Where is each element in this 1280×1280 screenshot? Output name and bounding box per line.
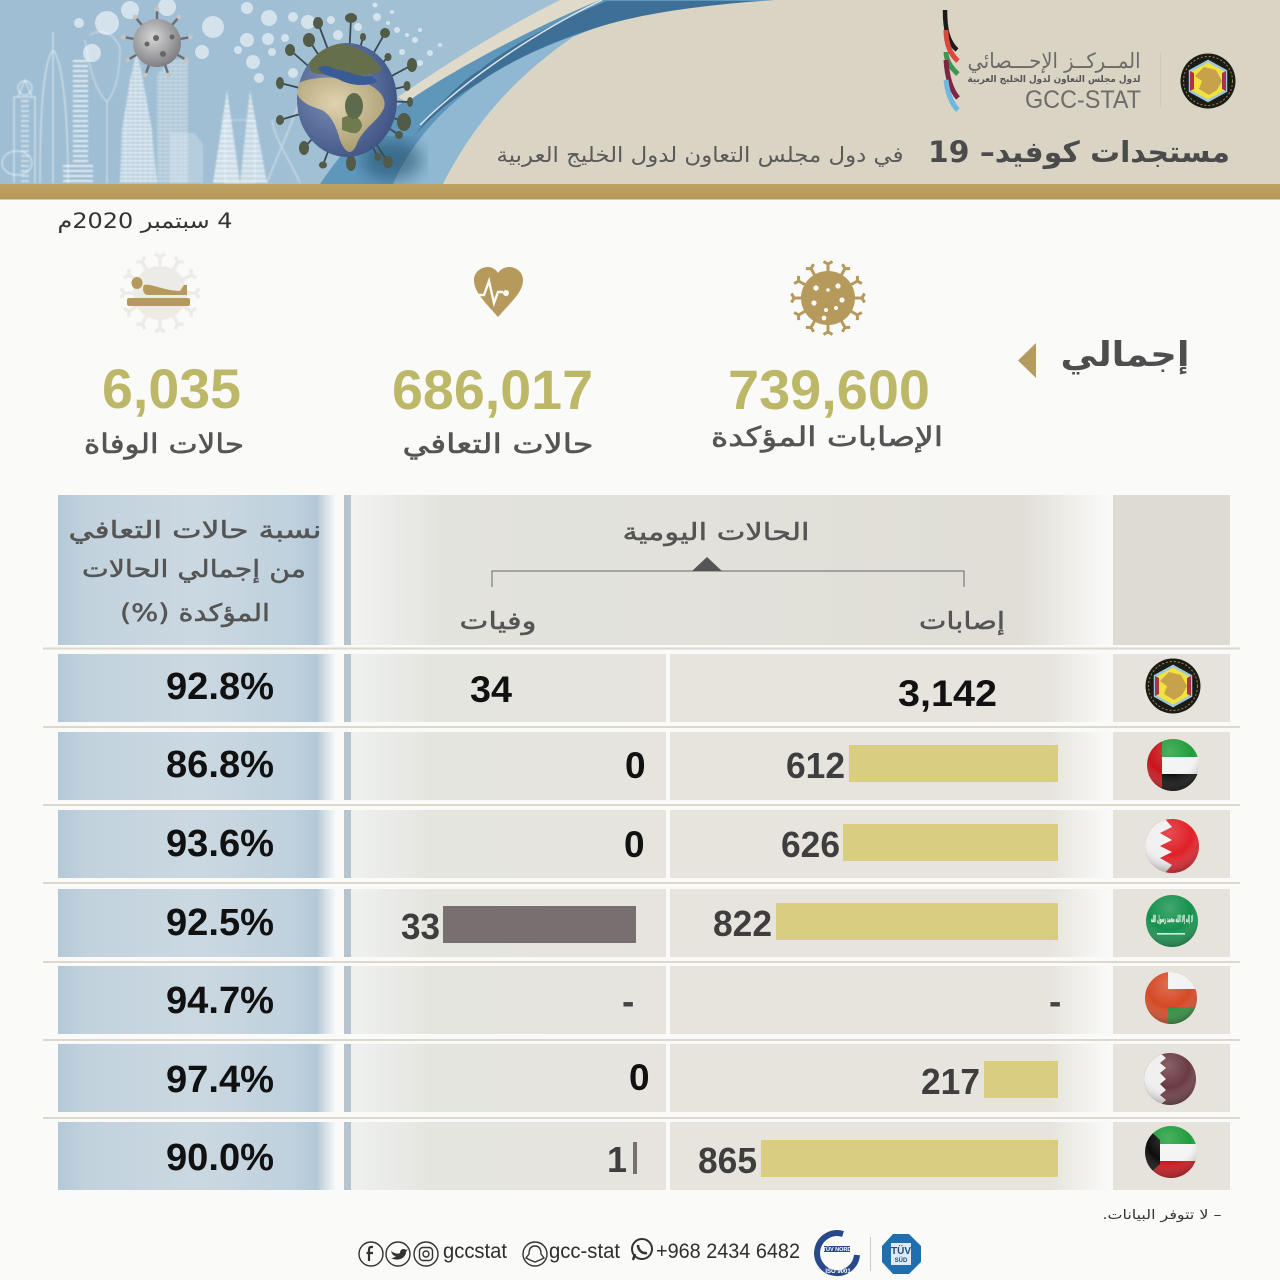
label: الإصابات المؤكدة [711,422,943,453]
icon: social media [359,1239,652,1266]
row: Qatar: 217 [921,1061,980,1102]
icon: TUV badge: TÜV [891,1244,911,1257]
row: UAE: 0 [625,745,646,786]
header: daily cases: إصابات [919,607,1005,636]
kpi: deaths [84,254,244,460]
header: daily cases [351,495,1111,645]
row: Oman: - [622,981,634,1022]
row: Kuwait: 1 [607,1139,627,1180]
row: Saudi Arabia: 92.5% [166,902,274,944]
gold band [0,184,1280,200]
number: 686,017 [392,358,593,421]
header banner [0,0,1280,184]
logo text: GCC-STAT: لدول مجلس التعاون لدول الخليج العربية [968,74,1140,85]
arrow [1018,343,1036,378]
flag: Oman [1145,972,1197,1024]
table header [58,495,1230,645]
icon: TUV badge [882,1234,921,1274]
icon: ISO certification badge [817,1233,857,1275]
number: 739,600 [728,358,930,421]
row: Bahrain: 626 [781,824,840,865]
row: UAE [58,732,1230,800]
row: GCC: 3,142 [898,673,997,714]
row: Qatar: 97.4% [166,1059,274,1101]
logo text: GCC-STAT: GCC-STAT [1025,86,1141,114]
section label: total: إجمالي [1060,335,1190,375]
row separators [43,648,1240,1118]
row: Saudi Arabia [58,889,1230,957]
row: Saudi Arabia: لا إله إلا الله محمد رسول الله [1151,915,1193,925]
footer: social contacts: gcc-stat [549,1240,620,1263]
footnote: – لا تتوفر البيانات. [1102,1208,1222,1223]
footer: social contacts [359,1239,800,1266]
row: UAE: 612 [786,745,845,786]
flag: Kuwait [1145,1126,1197,1178]
flag: Qatar [1144,1053,1196,1105]
icon: TUV badge: SÜD [895,1257,908,1264]
row: Bahrain: 0 [624,824,645,865]
logo text: GCC-STAT [968,49,1141,114]
row: Qatar [58,1044,1230,1112]
row: GCC [58,654,1230,722]
icon: virus [792,262,864,334]
section label: total [1018,335,1190,378]
kpi: confirmed cases [711,262,943,453]
label: حالات الوفاة [84,429,244,460]
row: Kuwait: 90.0% [166,1137,274,1179]
flag: Saudi Arabia [1146,895,1198,947]
kpi: recovered cases [392,267,594,460]
illustration: globe virus [276,13,422,180]
header: recovery percentage: من إجمالي الحالات [82,555,306,584]
logo text: GCC-STAT: المــركــز الإحـــصائي [968,49,1140,73]
row: Oman: - [1049,981,1061,1022]
row: UAE: 86.8% [166,744,274,786]
title: مستجدات كوفيد– 19 [928,135,1230,169]
date: 4 سبتمبر 2020م [58,209,232,233]
icon: ISO certification badge: ISO 9001 [825,1269,851,1275]
number: 6,035 [102,357,241,420]
header: recovery percentage: نسبة حالات التعافي [68,516,322,544]
illustration: grey virus [121,7,193,78]
skyline illustration [2,32,300,183]
icon: heart [474,267,523,317]
emblem [1146,658,1200,714]
decorative bubbles [74,0,464,83]
icon: ISO certification badge: TÜV NORD [823,1246,851,1253]
row: Oman: 94.7% [166,980,274,1022]
flag: UAE [1147,739,1201,793]
row: Qatar: 0 [629,1057,650,1098]
row: Kuwait [58,1122,1230,1190]
row: Saudi Arabia: 822 [713,903,772,944]
swoosh shapes [320,0,780,184]
footer: social contacts: +968 2434 6482 [656,1240,800,1263]
logo: GCC-STAT ribbon [945,10,958,110]
header: recovery percentage: المؤكدة (%) [120,599,270,627]
row: Kuwait: 865 [698,1140,757,1181]
row: Bahrain [58,810,1230,878]
flag: Bahrain [1145,819,1199,873]
row: GCC: 92.8% [166,666,274,708]
logo: GCC emblem [1180,54,1236,108]
footer: social contacts: gccstat [443,1240,507,1263]
header: recovery percentage [58,495,336,645]
icon: patient on bed with virus [121,254,199,332]
label: حالات التعافي [402,429,594,460]
header: daily cases: الحالات اليومية [622,518,810,546]
subtitle: في دول مجلس التعاون لدول الخليج العربية [496,143,904,167]
row: GCC: 34 [470,669,512,710]
header: daily cases: وفيات [460,607,536,635]
row: Oman [58,966,1230,1034]
row: Saudi Arabia: 33 [401,906,440,947]
row: Bahrain: 93.6% [166,823,274,865]
